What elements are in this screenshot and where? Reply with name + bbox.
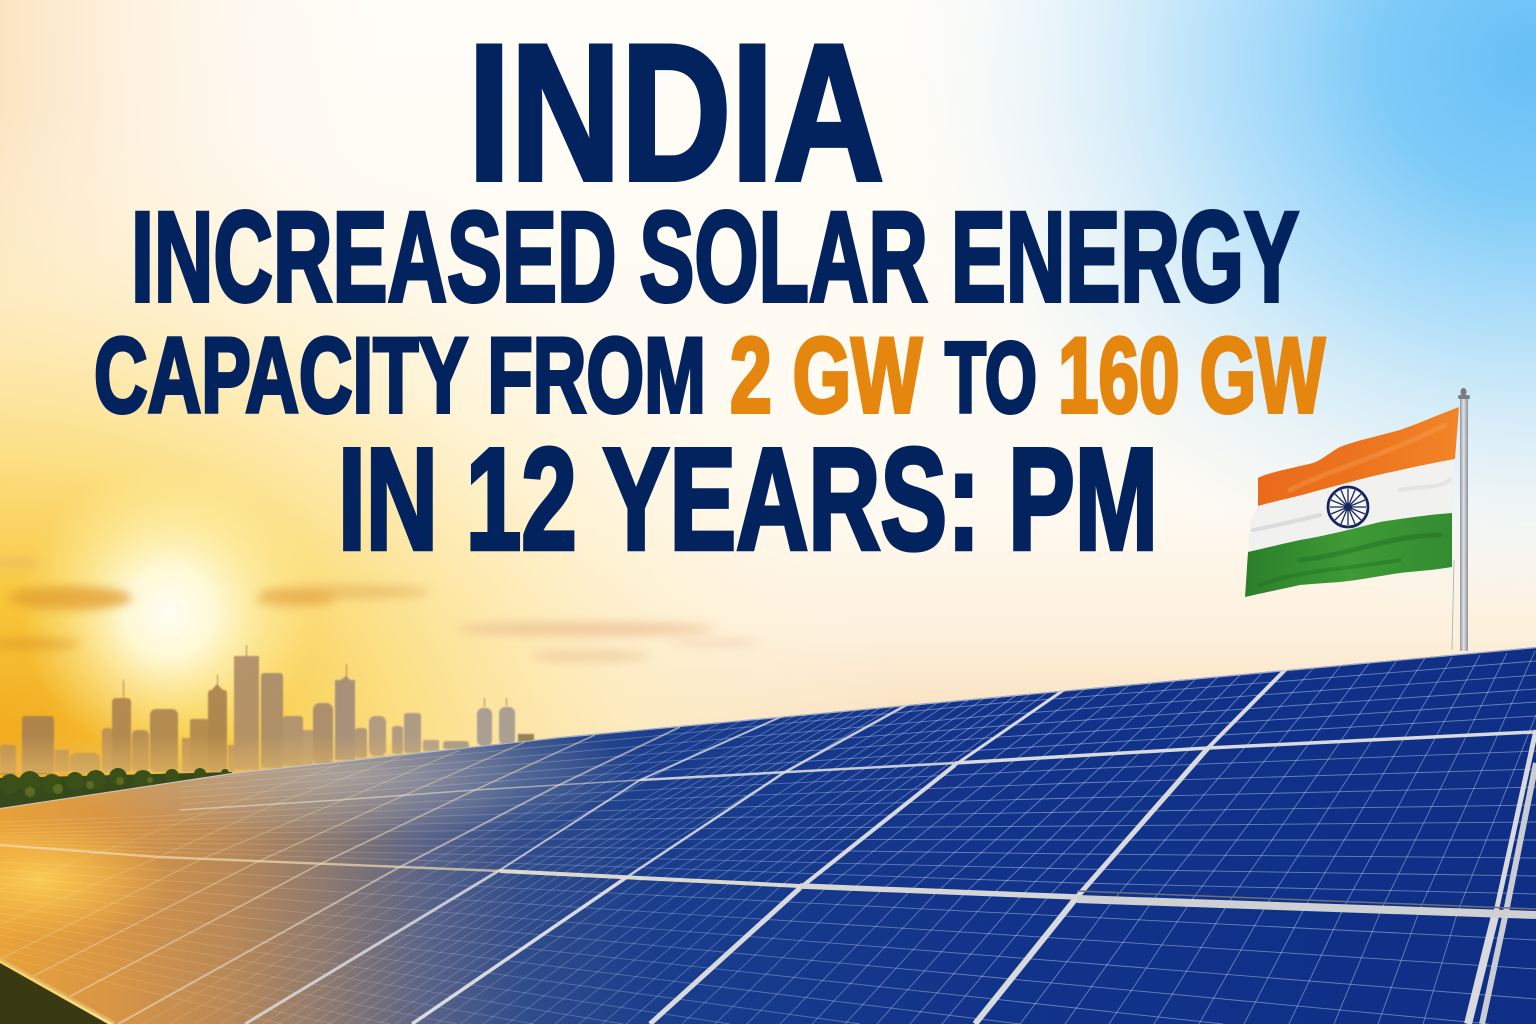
- flag green band: [1245, 513, 1452, 597]
- flag white band: [1248, 459, 1455, 552]
- reflections on panel surface: [0, 739, 614, 926]
- skyline haze: [0, 735, 440, 773]
- flagpole: [1452, 388, 1470, 651]
- Indian flag: [1245, 407, 1459, 597]
- word: to: TO: [945, 322, 1037, 434]
- tree line: [0, 768, 232, 810]
- highlight: 2 GW: 2 GW: [730, 315, 922, 435]
- title line: in 12 years: PM: IN 12 YEARS: PM: [338, 418, 1158, 580]
- solar panel array: [0, 647, 1536, 1024]
- title: [94, 4, 1325, 580]
- sun glow: [20, 462, 320, 762]
- grass corner: [0, 963, 108, 1024]
- title line: capacity from 2 GW to 160 GW: CAPACITY FROM: [94, 315, 706, 435]
- fine cell grid: [0, 651, 1536, 1024]
- panel frames: [0, 647, 1536, 1024]
- lower frame edge: [0, 960, 114, 1024]
- clouds: [0, 558, 760, 662]
- city skyline: [0, 645, 534, 775]
- highlight: 160 GW: 160 GW: [1058, 315, 1325, 435]
- title line: INDIA: INDIA: [468, 4, 884, 222]
- flag folds: [1253, 425, 1450, 585]
- flag saffron band: [1258, 407, 1459, 506]
- panel surface: [0, 647, 1536, 1024]
- ashoka chakra: [1328, 487, 1368, 527]
